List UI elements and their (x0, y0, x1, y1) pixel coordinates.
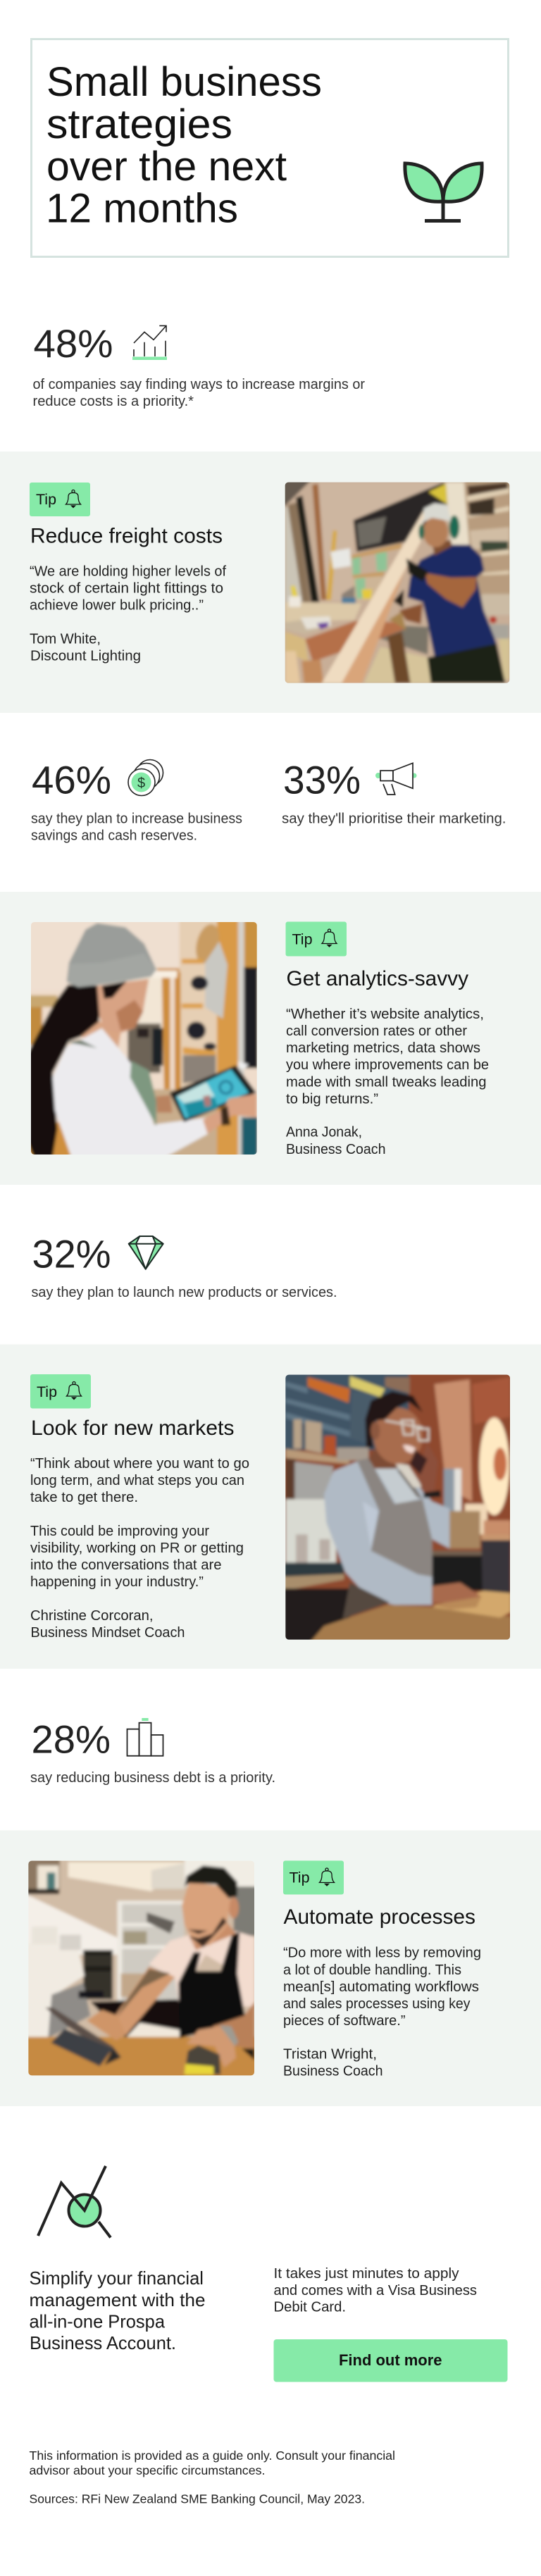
tip badge: Tip (289, 1869, 310, 1886)
quote: marketing metrics, data shows (286, 1040, 480, 1056)
stat: 33% (282, 758, 506, 827)
title: over the next (46, 144, 287, 189)
quote: stock of certain light fittings to (30, 580, 223, 596)
call to action text: Simplify your financial (30, 2267, 204, 2289)
disclaimer: Sources: RFi New Zealand SME Banking Council, May 2023. (30, 2492, 365, 2506)
photo: carpenter carrying timber (285, 482, 510, 683)
call to action text: management with the (30, 2289, 206, 2310)
icon: bell (66, 490, 80, 507)
stat: 33%: 33% (283, 758, 361, 802)
attribution: Tristan Wright, (283, 2047, 377, 2062)
stat: 48%: 48% (34, 321, 113, 366)
disclaimer: advisor about your specific circumstances. (30, 2463, 265, 2477)
quote: mean[s] automating workflows (283, 1979, 479, 1995)
stat caption (31, 811, 242, 844)
attribution: Christine Corcoran, (30, 1608, 153, 1624)
call to action text (30, 2267, 206, 2353)
apply text: and comes with a Visa Business (273, 2283, 477, 2298)
icon: bell (66, 1382, 82, 1399)
tip badge (286, 921, 347, 957)
panel: tip look for new markets (0, 1344, 541, 1669)
attribution: Tom White, (30, 631, 101, 647)
quote: long term, and what steps you can (30, 1473, 244, 1488)
apply text: Debit Card. (273, 2299, 346, 2315)
title: Small business (46, 59, 322, 105)
tip badge (30, 483, 90, 516)
attribution: Business Coach (286, 1142, 386, 1157)
disclaimer: This information is provided as a guide only. Consult your financial (30, 2449, 395, 2463)
attribution: Business Coach (283, 2064, 383, 2079)
heading: Look for new markets (31, 1417, 234, 1440)
title: 12 months (46, 186, 238, 231)
icon: gem (129, 1236, 163, 1269)
stat caption: reduce costs is a priority.* (32, 394, 194, 409)
panel: tip get analytics-savvy (0, 892, 541, 1185)
call to action text: Business Account. (30, 2332, 176, 2353)
stat caption: say they'll prioritise their marketing. (282, 811, 506, 827)
apply text (273, 2266, 477, 2315)
stat caption: say they plan to launch new products or services. (31, 1285, 337, 1300)
stat caption: say they plan to increase business (31, 811, 242, 827)
icon: coins (128, 759, 163, 796)
tip badge (283, 1861, 344, 1895)
quote: take to get there. (30, 1490, 138, 1505)
quote: happening in your industry.” (30, 1574, 204, 1590)
quote: achieve lower bulk pricing..” (30, 597, 204, 613)
icon: chart line with magnifier (38, 2166, 111, 2237)
call to action text: all-in-one Prospa (30, 2310, 166, 2332)
tip badge (30, 1374, 91, 1409)
quote: call conversion rates or other (286, 1023, 467, 1039)
stat: 32%: 32% (32, 1231, 111, 1276)
stat: 46%: 46% (32, 758, 111, 802)
apply text: It takes just minutes to apply (273, 2266, 459, 2282)
stat caption: of companies say finding ways to increase margins or (32, 377, 365, 392)
heading: Reduce freight costs (30, 524, 223, 548)
button: find out more: Find out more (339, 2351, 442, 2369)
disclaimer (30, 2449, 395, 2506)
title (46, 59, 322, 231)
stat: 28% (30, 1717, 275, 1786)
quote: you where improvements can be (286, 1057, 489, 1073)
quote: “Do more with less by removing (283, 1946, 481, 1961)
heading: Automate processes (283, 1905, 475, 1929)
quote: made with small tweaks leading (286, 1075, 486, 1090)
quote: “Think about where you want to go (30, 1456, 249, 1471)
tip badge: Tip (292, 931, 313, 948)
button: find out more (273, 2339, 507, 2382)
icon: sprouting plant (405, 163, 482, 221)
heading: Get analytics-savvy (286, 967, 468, 990)
quote: a lot of double handling. This (283, 1962, 461, 1978)
quote (30, 564, 226, 613)
stat: 32% (31, 1231, 337, 1300)
photo: shop worker with tablet (31, 922, 257, 1155)
quote (30, 1456, 249, 1590)
stat caption (32, 377, 365, 409)
quote: to big returns.” (286, 1092, 378, 1107)
attribution: Discount Lighting (30, 648, 141, 664)
stat: 48% (32, 321, 365, 409)
quote: visibility, working on PR or getting (30, 1541, 244, 1556)
attribution: Business Mindset Coach (31, 1625, 185, 1641)
quote: and sales processes using key (283, 1996, 471, 2012)
panel: tip automate processes (0, 1830, 541, 2106)
stat caption: say reducing business debt is a priority. (30, 1770, 275, 1786)
icon: rising chart (132, 325, 167, 360)
quote (283, 1946, 481, 2029)
stat: 46% (31, 758, 242, 844)
photo: cafe owner on phone (285, 1375, 510, 1640)
attribution (30, 1608, 185, 1641)
attribution: Anna Jonak, (286, 1124, 362, 1140)
stat: 28%: 28% (31, 1717, 111, 1761)
title: strategies (46, 101, 232, 147)
icon: coins: $ (137, 776, 145, 791)
tip badge: Tip (36, 492, 56, 508)
quote: “Whether it’s website analytics, (286, 1007, 484, 1022)
panel: title box (31, 39, 509, 256)
stat caption: savings and cash reserves. (31, 828, 197, 844)
quote: pieces of software.” (283, 2013, 406, 2029)
quote: “We are holding higher levels of (30, 564, 226, 579)
icon: bell (320, 1868, 334, 1886)
attribution (283, 2047, 383, 2079)
photo: barista at tablet (28, 1861, 254, 2075)
quote (286, 1007, 489, 1107)
panel: tip reduce freight costs (0, 452, 541, 713)
attribution (30, 631, 141, 664)
tip badge: Tip (37, 1384, 57, 1400)
quote: into the conversations that are (30, 1557, 221, 1573)
icon: bell (322, 929, 337, 947)
icon: megaphone (375, 763, 417, 795)
quote: This could be improving your (30, 1524, 209, 1539)
icon: bars (127, 1718, 163, 1756)
attribution (286, 1124, 386, 1157)
